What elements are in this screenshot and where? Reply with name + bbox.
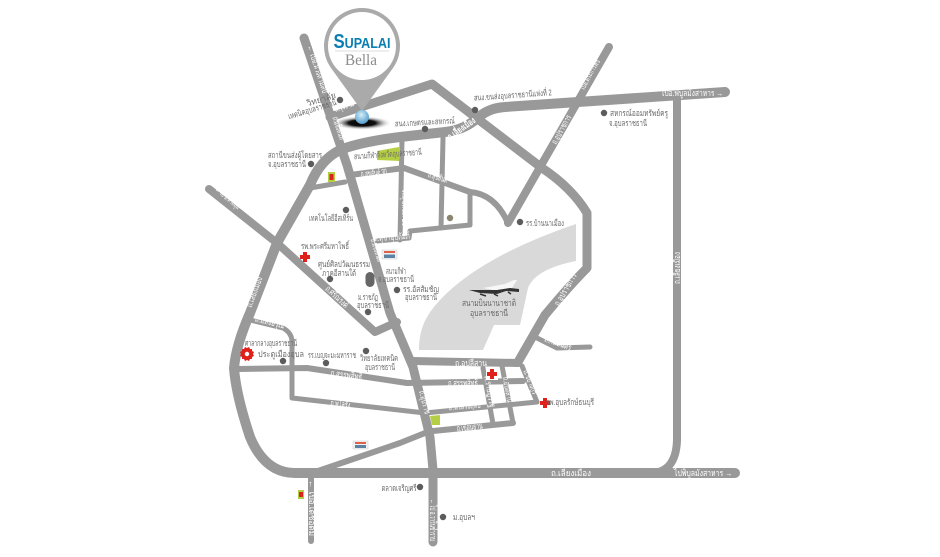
place labels: สนง.เกษตรและสหกรณ์ xyxy=(395,115,455,129)
road labels: ถ.เลี่ยงเมือง xyxy=(670,252,682,284)
road labels: ← ไปอ.เดชอุดม xyxy=(306,480,317,536)
place labels xyxy=(245,86,668,523)
place labels: สหกรณ์ออมทรัพย์ครู xyxy=(610,108,668,119)
icon: shops xyxy=(298,172,335,499)
place markers xyxy=(280,97,607,520)
road labels: ถ.เลี่ยงเมือง xyxy=(444,114,477,142)
location pin: Supalai Bella: Bella xyxy=(345,52,377,69)
road labels: ถ.อุปราช xyxy=(416,389,433,415)
road labels: ถ.แสงอรุณ xyxy=(254,314,285,332)
place labels: อุบลราชธานี xyxy=(365,362,395,373)
place labels: ตลาดเจริญศรี xyxy=(382,483,417,493)
road labels: ถ.แจ้งสนิท xyxy=(330,115,347,141)
road labels: ถ.ศรีณรงค์ xyxy=(323,283,351,310)
road labels: ไปอ.พิบูลมังสาหาร → xyxy=(660,88,723,99)
place labels: ม.อุบลฯ xyxy=(453,512,475,523)
road labels: ถ.สุขสันต์ 30 xyxy=(360,166,387,180)
road labels: ถ.อุปลีสาน xyxy=(455,358,487,369)
place labels: ศาลากลางอุบลราชธานี xyxy=(245,338,297,349)
place labels: สนามกีฬาจังหวัดอุบลราชธานี xyxy=(354,147,422,162)
place labels: ภาคอีสานใต้ xyxy=(322,268,356,278)
road labels: ← ไป อ.ตาลสุม xyxy=(213,184,243,212)
place labels: ศูนย์ศิลปวัฒนธรรม xyxy=(318,259,370,270)
road labels: ถ.รุ่งงาม xyxy=(333,98,355,115)
airport label: อุบลราชธานี xyxy=(470,308,508,319)
road labels: ถ.ชยางกูร xyxy=(520,368,540,396)
road labels: ถ.อุปราชการ xyxy=(549,113,574,146)
place labels: สนง.ขนส่งอุบลราชธานีแห่งที่ 2 xyxy=(473,86,552,104)
icon: supermarket logos xyxy=(353,250,397,449)
place labels: รร.อัสสัมชัญ xyxy=(403,284,439,294)
road labels: ถ.อุปราชการ xyxy=(552,271,580,308)
road labels: ถ.สรรพสิทธิ์ xyxy=(330,366,364,382)
road labels: ถ.อุปลีสาน xyxy=(500,376,515,403)
icon: city gate marker xyxy=(240,347,254,361)
place labels: เทคนิคอุบลราชธานี xyxy=(287,97,338,122)
place labels: อุบลราชธานี xyxy=(405,292,437,303)
icon: airplane xyxy=(469,280,519,296)
road labels: ถ.เลี่ยงเมือง xyxy=(242,275,264,309)
road labels: ถ.กมลนคร xyxy=(543,334,573,353)
road labels: ถ.ราษฎร์รัฐ xyxy=(481,375,499,408)
place labels: วิทยาลัยเทคนิค xyxy=(360,353,398,363)
icon: hospital crosses xyxy=(300,252,550,408)
road labels: ถ.เขื่อนธานี xyxy=(456,419,483,433)
airport label xyxy=(462,298,516,319)
road labels: ถ.เลี่ยงเมือง xyxy=(551,466,591,478)
road labels: ถ.สุขสันต์ xyxy=(427,168,449,186)
place labels: จ.อุบลราชธานี xyxy=(268,159,306,170)
place labels: รพ.อุบลรักษ์ธนบุรี xyxy=(546,397,594,408)
place labels: จ.อุบลราชธานี xyxy=(378,274,414,285)
place labels: จ.อุบลราชธานี xyxy=(609,118,647,129)
road labels: ถ.สุขาอุปถัมภ์ xyxy=(373,230,410,244)
airport grounds xyxy=(419,224,576,350)
green blocks xyxy=(377,147,440,425)
road labels: ไปอ.ตระการพืช xyxy=(576,57,602,92)
place labels: เทคโนโลยีอีสเทิร์น xyxy=(309,213,353,223)
road labels: ถ.แจ้งสนิท xyxy=(369,237,385,263)
place labels: ม.ราชภัฏ xyxy=(358,292,378,302)
road labels xyxy=(213,44,732,541)
place labels: รร.บ้านนาเมือง xyxy=(526,218,564,228)
road network xyxy=(209,38,735,542)
place labels: วิทยาลัย xyxy=(305,90,337,108)
road labels: ถ.พโลรัง xyxy=(330,398,351,410)
place labels: รร.เบญจะมะมหาราช xyxy=(308,350,356,360)
airport label: สนามบินนานาชาติ xyxy=(462,298,516,308)
road labels: ถ.สุขสันต์ 26 xyxy=(399,190,411,226)
road labels: ← ไปอ.ม่วงสามสิบ xyxy=(305,44,330,95)
location pin: Supalai Bella xyxy=(324,8,400,130)
place labels: รพ.พระศรีมหาโพธิ์ xyxy=(301,240,350,251)
location pin: Supalai Bella: SUPALAI xyxy=(334,31,390,53)
road labels: ถ.สรรพสิทธิ์ xyxy=(448,376,479,388)
place labels: อุบลราชธานี xyxy=(357,300,389,311)
road labels: ไปพิบูลมังสาหาร → xyxy=(673,468,732,479)
place labels: สถานีขนส่งผู้โดยสาร xyxy=(268,150,322,161)
place labels: ประตูเมืองอุบล xyxy=(258,349,304,360)
place labels: สนามกีฬา xyxy=(386,266,406,276)
road labels: ถ.พโลรังฤทธิ์ xyxy=(448,398,482,412)
